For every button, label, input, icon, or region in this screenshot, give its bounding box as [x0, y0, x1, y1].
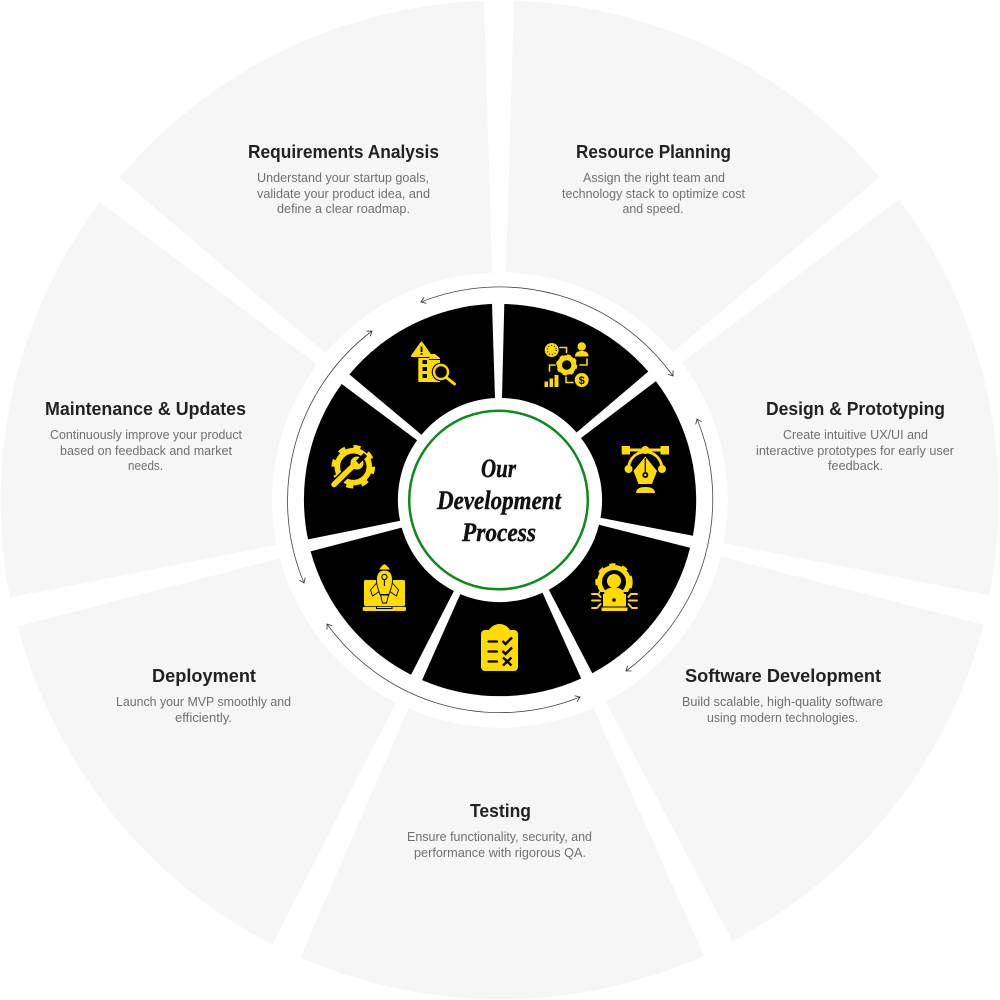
icon: rocket launching from laptop [363, 564, 406, 611]
title: Our Development Process: Our [481, 454, 517, 483]
icon: developer gear and laptop [592, 565, 637, 611]
text: Testing description: performance with rigorous QA. [414, 846, 586, 860]
panel: Deployment [18, 558, 396, 944]
text: Maintenance & Updates description: needs. [128, 459, 163, 473]
title: Our Development Process [436, 454, 562, 547]
text: Software Development description [682, 695, 883, 725]
hub: center circle [409, 411, 588, 589]
icon: test checklist clipboard [481, 624, 518, 671]
heading: Design & Prototyping: Design & Prototyping [766, 398, 945, 419]
title: Our Development Process: Process [461, 518, 536, 547]
text: Requirements Analysis description: validate your product idea, and [257, 187, 430, 201]
text: Maintenance & Updates description: Continuously improve your product [50, 428, 243, 442]
text: Design & Prototyping description [756, 428, 954, 473]
text: Design & Prototyping description: Create intuitive UX/UI and [783, 428, 928, 442]
panel: Requirements Analysis [120, 1, 492, 353]
text: Testing description: Ensure functionality, security, and [407, 830, 592, 844]
panel: Maintenance & Updates [1, 202, 317, 598]
arrow: top double-headed arc [421, 287, 673, 376]
segment: Deployment wheel slice [311, 528, 454, 675]
segment: Software Development wheel slice [549, 525, 690, 673]
icon: resource planning [544, 342, 589, 387]
text: Resource Planning description [562, 171, 746, 216]
segment: Testing wheel slice [422, 593, 581, 696]
text: Deployment description: Launch your MVP smoothly and [116, 695, 291, 709]
panel: Design & Prototyping [682, 200, 999, 595]
arrow: bottom double-headed arc [327, 624, 580, 713]
text: Design & Prototyping description: feedback. [828, 459, 883, 473]
segment: Resource Planning wheel slice [502, 304, 648, 432]
text: Maintenance & Updates description [50, 428, 243, 473]
text: Resource Planning description: and speed. [622, 202, 684, 216]
heading: Maintenance & Updates: Maintenance & Updates [45, 398, 246, 419]
segment: Maintenance & Updates wheel slice [304, 384, 417, 539]
arrow: left double-headed arc [288, 331, 372, 583]
text: Software Development description: Build scalable, high-quality software [682, 695, 883, 709]
heading: Testing: Testing [470, 800, 531, 821]
heading: Software Development: Software Development [685, 665, 881, 686]
icon: design pen tool [622, 446, 669, 493]
text: Testing description [407, 830, 592, 860]
text: Resource Planning description: Assign the right team and [583, 171, 725, 185]
text: Requirements Analysis description [257, 171, 430, 216]
text: Requirements Analysis description: Understand your startup goals, [257, 171, 429, 185]
icon: gear and wrench [329, 447, 373, 490]
panel: Resource Planning [506, 1, 880, 352]
icon: resource planning: $ [579, 375, 585, 387]
title: Our Development Process: Development [436, 486, 562, 515]
text: Software Development description: using modern technologies. [707, 711, 858, 725]
text: Design & Prototyping description: interactive prototypes for early user [756, 444, 954, 458]
panel: Software Development [606, 557, 984, 941]
text: Deployment description [116, 695, 291, 725]
segment: Design & Prototyping wheel slice [581, 381, 696, 536]
text: Maintenance & Updates description: based on feedback and market [60, 444, 233, 458]
heading: Requirements Analysis: Requirements Analysis [248, 141, 439, 162]
heading: Deployment: Deployment [152, 665, 256, 686]
heading: Resource Planning: Resource Planning [576, 141, 731, 162]
arrow: right double-headed arc [626, 419, 713, 671]
text: Resource Planning description: technology stack to optimize cost [562, 187, 746, 201]
icon: warning document magnifier [412, 342, 454, 384]
text: Deployment description: efficiently. [175, 711, 232, 725]
text: Requirements Analysis description: define a clear roadmap. [277, 202, 410, 216]
panel: Testing [300, 708, 704, 999]
segment: Requirements Analysis wheel slice [349, 304, 495, 435]
